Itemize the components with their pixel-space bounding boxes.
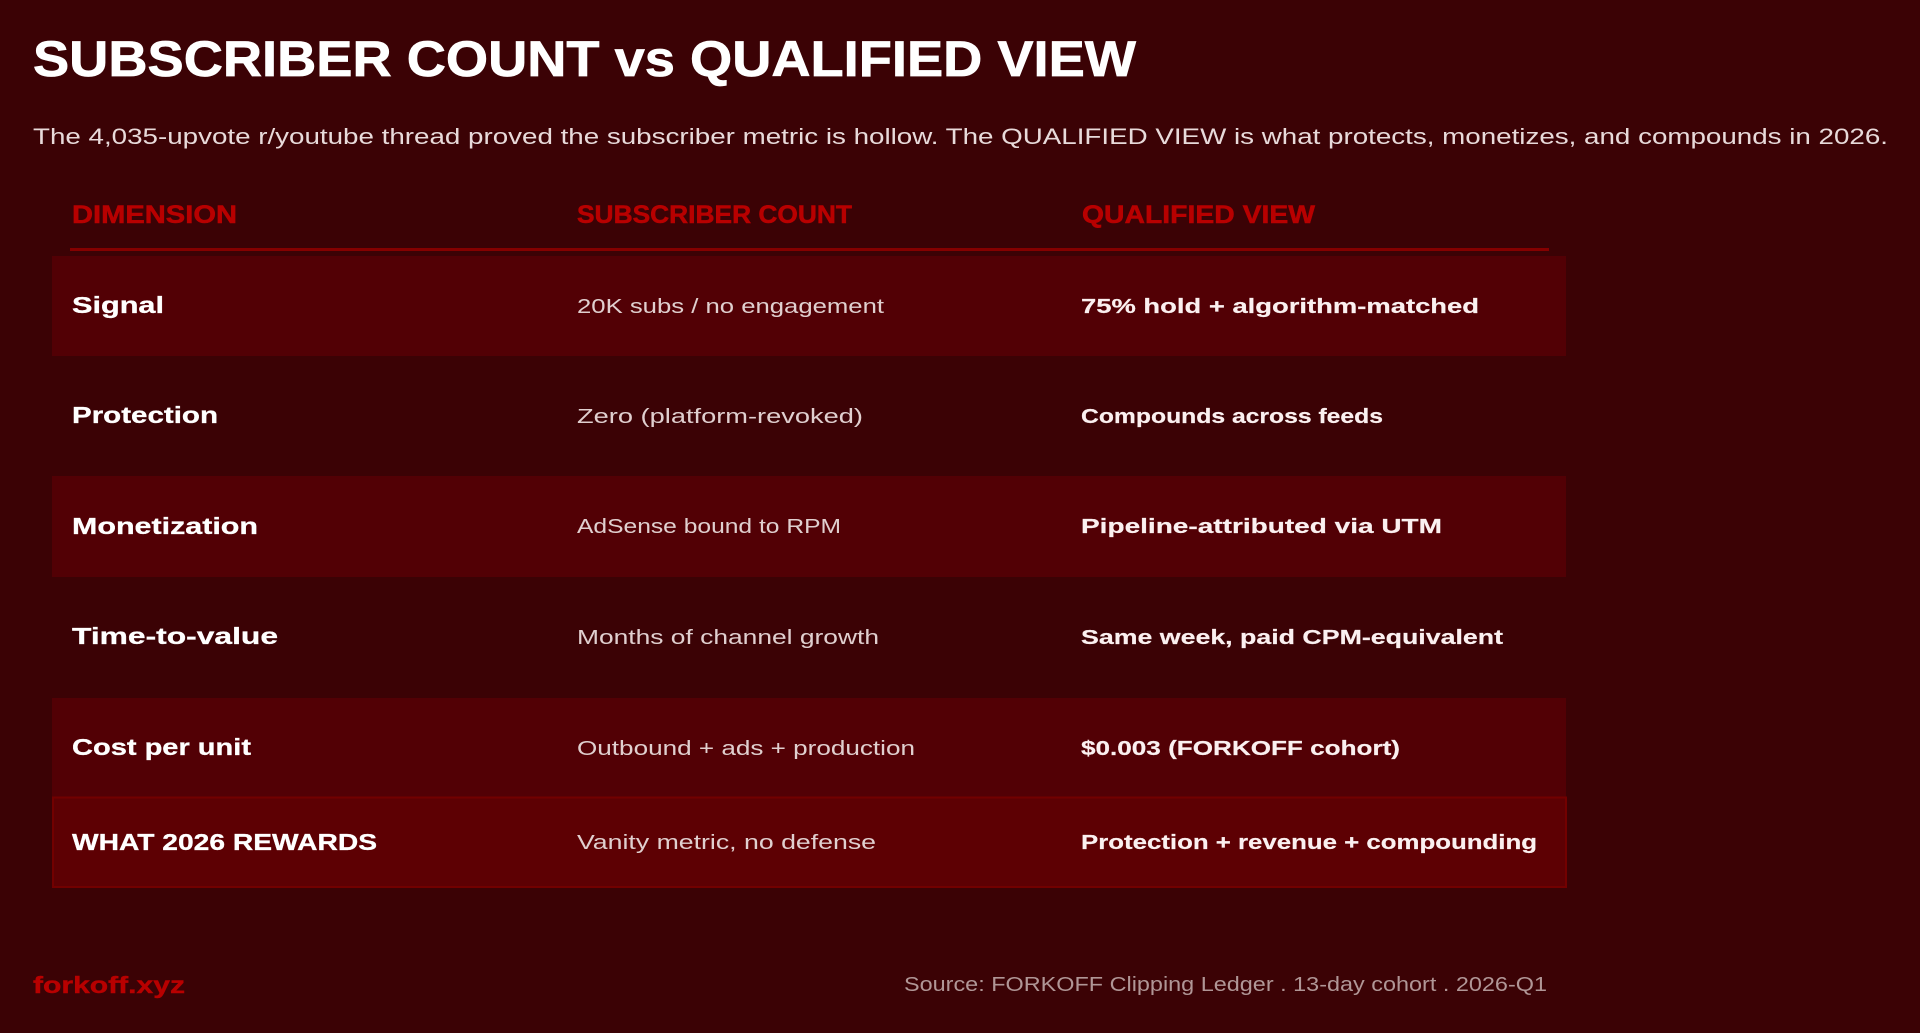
row: monetization: Pipeline-attributed via UTM: [1081, 515, 1442, 538]
column heading: subscriber count: SUBSCRIBER COUNT: [577, 201, 852, 229]
row: what 2026 rewards: WHAT 2026 REWARDS: [72, 829, 377, 855]
row: time-to-value: [52, 587, 1566, 687]
row: what 2026 rewards: [53, 798, 1566, 887]
table header: [70, 201, 1549, 251]
column heading: qualified view: QUALIFIED VIEW: [1082, 201, 1315, 229]
subtitle: The 4,035-upvote r/youtube thread proved the subscriber metric is hollow. The QUALIFIED VIEW is what protects, monetizes, and compounds in 2026.: [33, 124, 1888, 149]
column heading: dimension: DIMENSION: [72, 201, 237, 229]
brand footer: forkoff.xyz: [33, 972, 185, 998]
row: protection: Compounds across feeds: [1081, 405, 1383, 428]
row: monetization: AdSense bound to RPM: [577, 515, 841, 538]
row: time-to-value: Time-to-value: [72, 623, 278, 649]
row: what 2026 rewards: Vanity metric, no defense: [577, 831, 876, 854]
row: cost per unit: Cost per unit: [72, 734, 251, 760]
source note: Source: FORKOFF Clipping Ledger . 13-day cohort . 2026-Q1: [904, 974, 1547, 996]
row: protection: [52, 366, 1566, 466]
row: time-to-value: Same week, paid CPM-equivalent: [1081, 626, 1503, 649]
row: monetization: Monetization: [72, 513, 258, 539]
row: signal: [52, 256, 1566, 356]
row: signal: 75% hold + algorithm-matched: [1081, 295, 1479, 318]
comparison table: [52, 201, 1566, 887]
row: monetization: [52, 476, 1566, 577]
row: what 2026 rewards: Protection + revenue + compounding: [1081, 831, 1537, 854]
row: signal: Signal: [72, 292, 164, 318]
row: time-to-value: Months of channel growth: [577, 626, 879, 649]
row: signal: 20K subs / no engagement: [577, 295, 884, 318]
row: protection: Zero (platform-revoked): [577, 405, 863, 428]
row: cost per unit: [52, 698, 1566, 797]
title: SUBSCRIBER COUNT vs QUALIFIED VIEW: [33, 31, 1137, 87]
row: protection: Protection: [72, 402, 218, 428]
row: cost per unit: Outbound + ads + production: [577, 737, 915, 760]
row: cost per unit: $0.003 (FORKOFF cohort): [1081, 737, 1400, 760]
